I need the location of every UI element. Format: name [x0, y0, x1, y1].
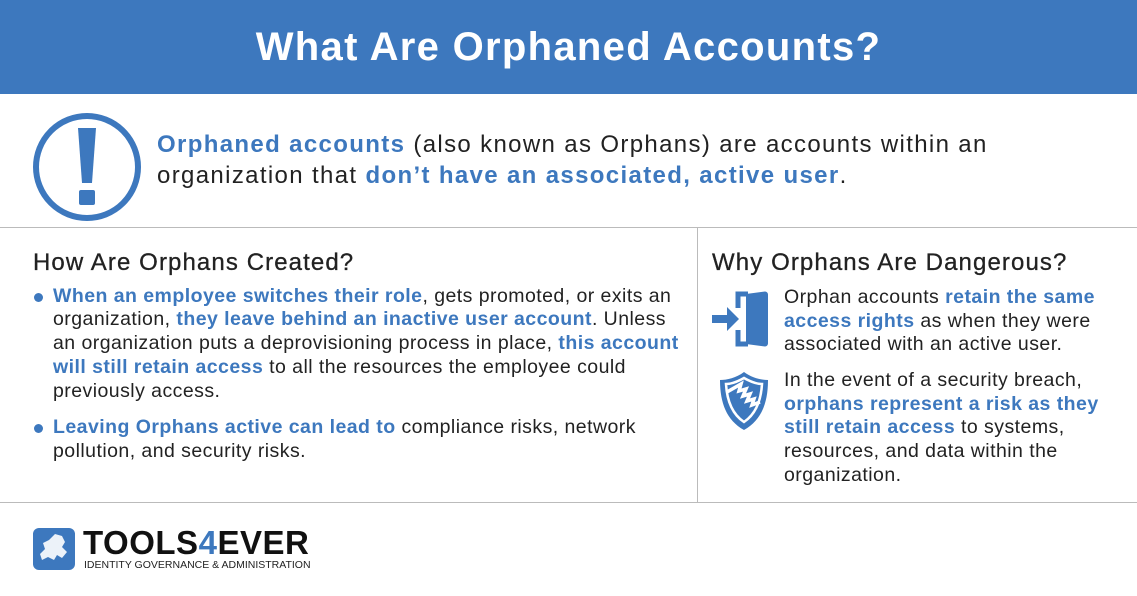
- text: retain rights: [784, 286, 1095, 355]
- logo icon: [33, 528, 75, 570]
- bullet 1: an organization puts a deprovisioning process in place, this account: [53, 332, 679, 354]
- heading: How Are Orphans Created?: [33, 249, 354, 276]
- bullet 1: [33, 285, 693, 403]
- bullet 2: [33, 416, 693, 464]
- text: breach risk: [784, 369, 1099, 486]
- logo: [33, 524, 311, 571]
- panel: how created: [33, 249, 679, 462]
- text: breach risk: In the event of a security breach,: [784, 369, 1082, 391]
- bullet 1: When an employee switches their role, gets promoted, or exits an: [53, 285, 671, 307]
- bullet 2: Leaving Orphans active can lead to compliance risks, network: [53, 416, 636, 438]
- text: retain rights: Orphan accounts retain the same: [784, 286, 1095, 308]
- text: breach risk: orphans represent a risk as they: [784, 393, 1099, 415]
- icon: shield: [720, 372, 768, 430]
- intro text: organization that don’t have an associated, active user.: [157, 162, 848, 189]
- icon: door: [712, 292, 768, 346]
- logo text: TOOLS4EVER: [83, 524, 309, 561]
- bullet 1: organization, they leave behind an inactive user account. Unless: [53, 308, 666, 330]
- title: What Are Orphaned Accounts?: [256, 25, 881, 69]
- bullet 2: pollution, and security risks.: [53, 440, 306, 462]
- heading: Why Orphans Are Dangerous?: [712, 249, 1067, 276]
- intro text: [157, 131, 988, 189]
- text: breach risk: resources, and data within the: [784, 440, 1058, 462]
- bullet 1: will still retain access to all the resources the employee could: [53, 356, 626, 378]
- divider lines: [0, 227, 1137, 228]
- text: retain rights: associated with an active user.: [784, 333, 1062, 355]
- bullet 1: previously access.: [53, 380, 220, 402]
- text: retain rights: access rights as when they were: [784, 310, 1091, 332]
- title: [0, 0, 1137, 94]
- text: breach risk: still retain access to systems,: [784, 416, 1065, 438]
- logo: IDENTITY GOVERNANCE & ADMINISTRATION: [84, 559, 311, 571]
- intro text: Orphaned accounts (also known as Orphans) are accounts within an: [157, 131, 988, 158]
- icon: exclamation: [33, 113, 141, 221]
- text: breach risk: organization.: [784, 464, 902, 486]
